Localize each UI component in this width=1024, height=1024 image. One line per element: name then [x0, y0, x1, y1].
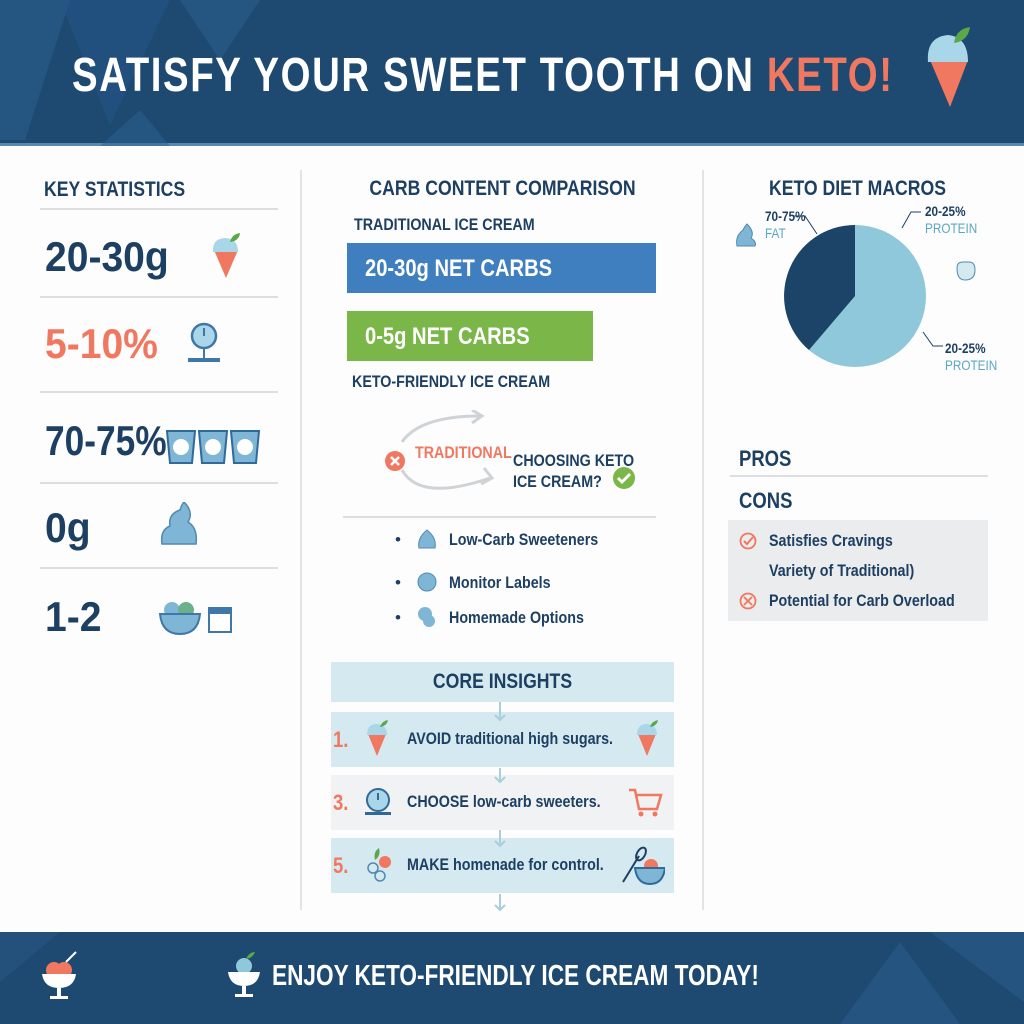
label: keto-friendly: KETO-FRIENDLY ICE CREAM	[352, 372, 550, 391]
pros cons box: Variety of Traditional)	[769, 561, 914, 580]
footer banner	[0, 932, 1024, 1024]
bar: keto	[347, 311, 593, 361]
pros cons box: Satisfies Cravings	[769, 531, 893, 550]
icon: sundae center	[228, 952, 260, 997]
cycle diagram: TRADITIONAL	[415, 443, 512, 462]
heading: pros: PROS	[739, 446, 791, 471]
footer text: ENJOY KETO-FRIENDLY ICE CREAM TODAY!	[272, 960, 759, 992]
icon: three tubs	[166, 430, 260, 464]
pie chart	[736, 212, 976, 367]
insight row 3	[331, 775, 674, 830]
title: SATISFY YOUR SWEET TOOTH ON KETO!	[72, 49, 894, 102]
list: tips: Low-Carb Sweeteners	[449, 530, 598, 549]
panel: keto diet macros: PROTEIN	[925, 220, 977, 236]
pros cons box: Potential for Carb Overload	[769, 591, 955, 610]
list: tips: Homemade Options	[449, 608, 584, 627]
insight row 1: AVOID traditional high sugars.	[407, 729, 613, 748]
list: tips: Monitor Labels	[449, 573, 551, 592]
stat: 70-75%: 70-75%	[45, 417, 167, 464]
heading: cons: CONS	[739, 488, 792, 513]
stat: 1-2: 1-2	[45, 593, 101, 640]
list: tips: •	[395, 530, 401, 549]
icon: scale	[188, 322, 220, 362]
insight row 5	[331, 838, 674, 893]
panel: key statistics	[40, 178, 278, 640]
column dividers	[300, 170, 302, 910]
stat: 20-30g: 20-30g	[45, 233, 169, 280]
icon: bowl and calendar	[158, 602, 232, 635]
list: tips: •	[395, 573, 401, 592]
panel: keto diet macros: FAT	[765, 225, 786, 241]
stat: 5-10%: 5-10%	[45, 320, 158, 367]
panel: keto diet macros	[736, 177, 997, 373]
panel: keto diet macros: 20-25%	[925, 203, 966, 219]
icon: swirl	[160, 502, 198, 545]
cycle diagram: ICE CREAM?	[513, 472, 602, 491]
icon: sundae left	[42, 951, 77, 999]
panel: keto diet macros: PROTEIN	[945, 357, 997, 373]
list: tips: •	[395, 608, 401, 627]
icon: cone	[213, 233, 240, 278]
core insights header: CORE INSIGHTS	[433, 670, 572, 693]
header banner	[0, 0, 1024, 146]
bar: traditional: 20-30g NET CARBS	[365, 255, 552, 282]
cycle diagram	[385, 410, 635, 491]
panel: keto diet macros: 20-25%	[945, 340, 986, 356]
heading: key statistics: KEY STATISTICS	[44, 178, 185, 201]
heading: carb content comparison: CARB CONTENT COMPARISON	[369, 177, 636, 200]
icon: ice cream cone	[928, 27, 970, 107]
list: tips	[395, 530, 598, 627]
pros cons box	[728, 520, 988, 621]
bar: traditional	[347, 243, 656, 293]
flow arrows	[494, 702, 506, 912]
panel: keto diet macros: 70-75%	[765, 208, 806, 224]
insight row 1: 1.	[333, 727, 348, 752]
core insights header	[331, 662, 674, 702]
insight row 5: 5.	[333, 853, 348, 878]
insight row 3: CHOOSE low-carb sweeters.	[407, 792, 601, 811]
panel: carb comparison	[331, 177, 674, 912]
heading: keto diet macros: KETO DIET MACROS	[769, 177, 946, 200]
insight row 1	[331, 712, 674, 767]
insight row 5: MAKE homenade for control.	[407, 855, 604, 874]
label: traditional ice cream: TRADITIONAL ICE CREAM	[354, 215, 535, 234]
stat: 0g: 0g	[45, 504, 91, 551]
bar: keto: 0-5g NET CARBS	[365, 323, 530, 350]
insight row 3: 3.	[333, 790, 348, 815]
cycle diagram: CHOOSING KETO	[513, 451, 634, 470]
